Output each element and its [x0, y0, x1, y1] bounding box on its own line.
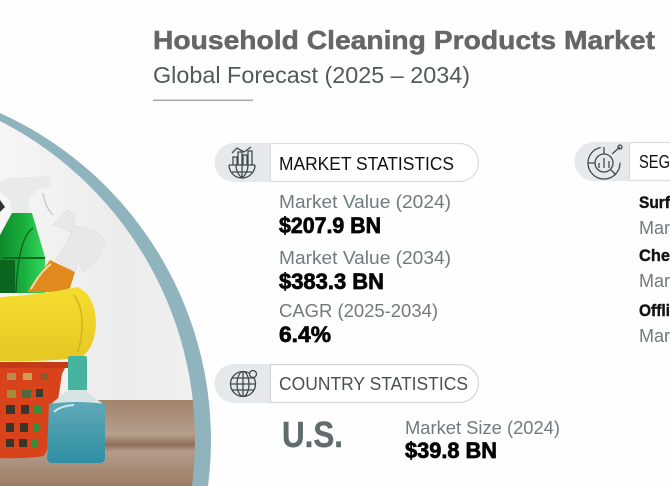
segment: offli	[639, 301, 670, 346]
panel: country statistics	[214, 364, 560, 463]
stat: market value 2034: $383.3 BN	[279, 269, 384, 294]
icon: donut chart with target	[588, 145, 622, 179]
panel: market statistics	[215, 143, 478, 347]
segment: che: Mar	[639, 271, 670, 291]
icon: orange spray bottle	[28, 210, 105, 292]
title underline	[153, 100, 253, 101]
segment: offli: Mar	[639, 326, 670, 346]
segment: surf: Mar	[639, 218, 670, 238]
icon: globe with bar chart	[229, 147, 255, 178]
subtitle: Global Forecast (2025 – 2034)	[153, 62, 470, 88]
circular photo frame ring	[0, 113, 211, 486]
title: Household Cleaning Products Market	[153, 25, 655, 55]
stat: market value 2024: $207.9 BN	[279, 213, 381, 238]
icon: blue glass bottle	[47, 356, 105, 463]
stat: market value 2024: Market Value (2024)	[279, 192, 451, 212]
stat: CAGR: 6.4%	[279, 322, 331, 347]
stat: market value 2024	[279, 192, 451, 238]
heading pill: segment	[575, 142, 670, 181]
segment: che	[639, 246, 670, 291]
icon: green spray bottle	[0, 176, 53, 293]
icon: globe with pin	[230, 370, 256, 396]
heading pill: market statistics: MARKET STATISTICS	[279, 153, 454, 174]
panel: segment statistics (cropped at right edge)	[575, 142, 670, 346]
heading pill: country statistics	[214, 364, 478, 403]
stat: market size	[405, 418, 560, 463]
heading pill: market statistics	[215, 143, 478, 182]
stat: market value 2034	[279, 248, 451, 294]
stat: CAGR	[279, 301, 438, 347]
photo: cleaning products	[0, 110, 200, 486]
stat: market size: $39.8 BN	[405, 438, 497, 463]
segment: surf	[639, 193, 670, 238]
stat: CAGR: CAGR (2025-2034)	[279, 301, 438, 321]
stat: U.S.: U.S.	[282, 414, 343, 455]
stat: market value 2034: Market Value (2034)	[279, 248, 451, 268]
heading pill: country statistics: COUNTRY STATISTICS	[279, 373, 468, 394]
stat: market size: Market Size (2024)	[405, 418, 560, 438]
icon: orange basket	[0, 362, 68, 458]
icon: yellow rolled towel	[0, 287, 96, 361]
